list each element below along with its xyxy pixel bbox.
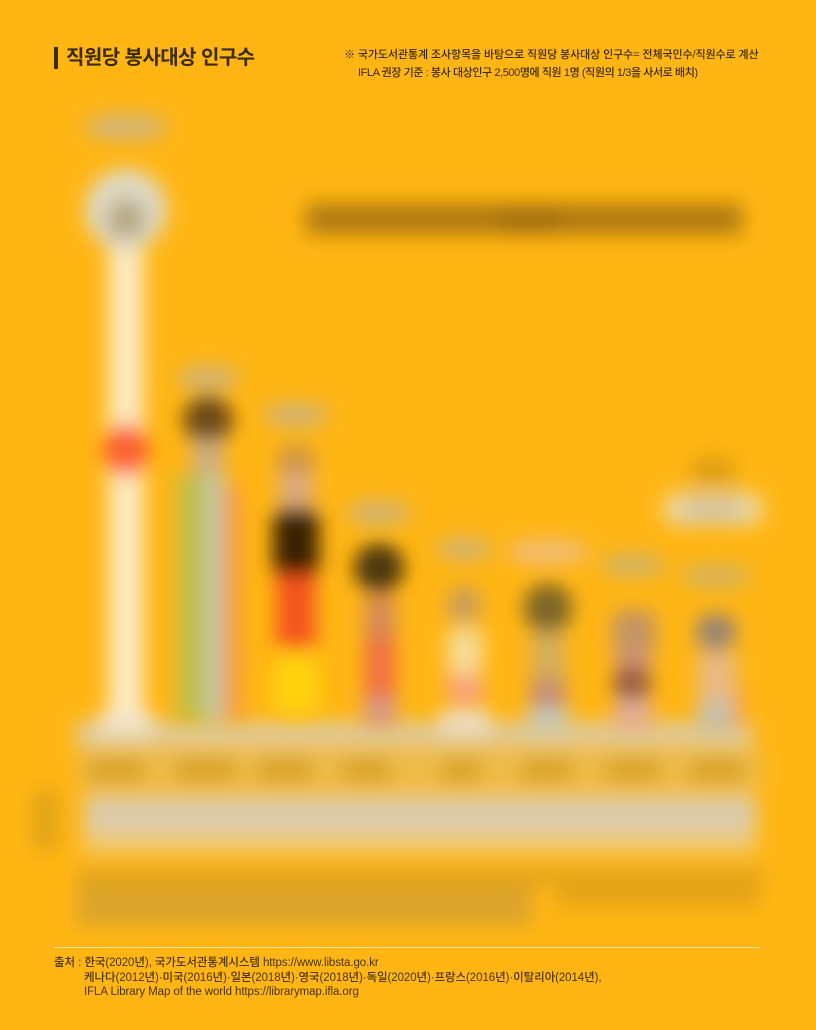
method note: ※ 국가도서관통계 조사항목을 바탕으로 직원당 봉사대상 인구수= 전체국민수/직원수로 계산 [344,49,759,61]
source [54,956,601,998]
title: 직원당 봉사대상 인구수 [66,47,255,69]
figure 8: Italy [680,564,752,732]
source: 케나다(2012년)·미국(2016년)·일본(2018년)·영국(2018년)·독일(2020년)·프랑스(2016년)·이탈리아(2014년), [84,972,601,984]
source: IFLA Library Map of the world https://librarymap.ifla.org [84,986,359,998]
IFLA recommendation callout [663,458,763,526]
method note [344,48,759,78]
title bar [54,47,58,69]
figure 4: Japan [347,501,411,726]
figure 3: USA [263,403,329,715]
source: 출처 : 한국(2020년), 국가도서관통계시스템 https://www.libsta.go.kr [54,957,379,969]
country name labels [88,760,744,780]
figure 7: France [601,553,665,730]
blurred headline callout [306,204,742,234]
figure 6: Germany [506,539,590,732]
baseline strip and table [32,722,764,926]
figure 1: Korea [84,114,168,735]
table row label [32,790,60,850]
figure 5: UK [436,538,492,734]
divider line [54,947,760,948]
method note: IFLA 권장 기준 : 봉사 대상인구 2,500명에 직원 1명 (직원의 1/3을 사서로 배치) [358,66,698,78]
footnote block [76,868,764,926]
table of values [84,794,756,852]
figure 2: Canada [176,366,242,725]
